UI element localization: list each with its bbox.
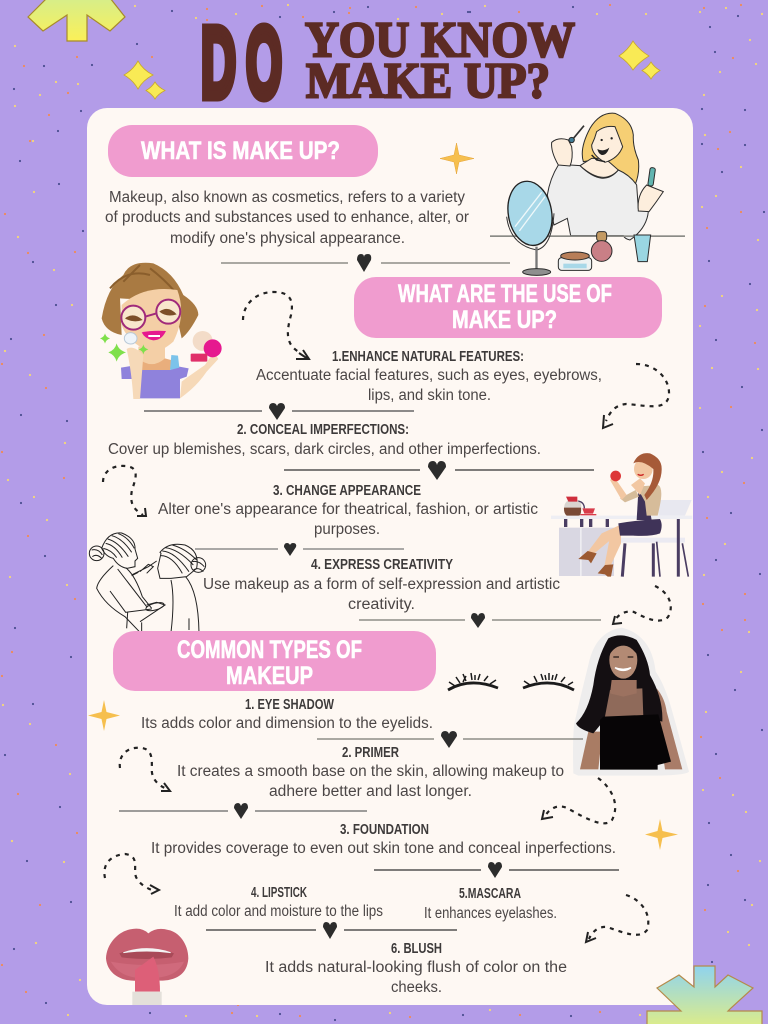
text block: mascara: 5.MASCARA (459, 886, 521, 902)
text block: conceal imperfections: Cover up blemishes, scars, dark circles, and other imperfections. (108, 441, 541, 458)
arrow: dashed left 2 (120, 748, 170, 791)
icon: gold star 1 (440, 143, 474, 174)
heading: what is make up (108, 125, 378, 177)
text block: change appearance: Alter one's appearance for theatrical, fashion, or artistic (158, 501, 538, 518)
divider (206, 922, 457, 939)
text block: conceal imperfections: 2. CONCEAL IMPERFECTIONS: (237, 422, 409, 438)
text block: mascara: It enhances eyelashes. (424, 905, 557, 922)
divider (195, 543, 404, 556)
heading: what are the use of make up (354, 277, 662, 338)
photo: woman in black top (573, 628, 689, 776)
divider (317, 731, 583, 748)
arrow: dashed to enhance (243, 292, 309, 359)
illustration: blonde woman with mirror (490, 113, 685, 275)
icon: yellow arrow star top left (28, 0, 125, 41)
text block: primer: It creates a smooth base on the skin, allowing makeup to (177, 763, 564, 780)
text block: primer (177, 745, 564, 800)
text block: blush: 6. BLUSH (391, 941, 442, 957)
icon: gradient star bottom right (647, 966, 762, 1024)
title: you know make up (305, 11, 575, 108)
text: O (246, 7, 282, 119)
text block: primer: adhere better and last longer. (269, 783, 472, 800)
panel: main card (87, 108, 693, 1005)
divider (144, 403, 414, 420)
icon: sparkles right (619, 41, 660, 79)
icon: gold star 3 (645, 819, 678, 850)
text block: primer: 2. PRIMER (342, 745, 399, 761)
text block: enhance natural features: 1.ENHANCE NATURAL FEATURES: (332, 349, 524, 365)
text block: change appearance: purposes. (314, 521, 380, 538)
text block: change appearance (158, 483, 538, 538)
icon: gold star 2 (88, 700, 120, 731)
text block: eye shadow: Its adds color and dimension to the eyelids. (141, 715, 433, 732)
text block: definition: modify one's physical appearance. (170, 230, 405, 247)
text block: enhance natural features: Accentuate facial features, such as eyes, eyebrows, (256, 367, 602, 384)
arrow: dashed left 3 (104, 854, 159, 894)
illustration: woman with glasses (100, 263, 222, 399)
heading: what are the use of make up: WHAT ARE THE USE OF (398, 280, 612, 308)
text block: express creativity: 4. EXPRESS CREATIVITY (311, 557, 453, 573)
text block: definition: of products and substances used to enhance, alter, or (105, 209, 469, 226)
text block: lipstick (174, 885, 383, 920)
text block: foundation: It provides coverage to even out skin tone and conceal inperfections. (151, 840, 616, 857)
text block: definition (105, 189, 469, 247)
divider (374, 862, 619, 878)
text block: foundation (151, 822, 616, 857)
text block: express creativity: creativity. (348, 596, 415, 613)
arrow: dashed left 1 (103, 466, 146, 516)
heading: what is make up: WHAT IS MAKE UP? (141, 137, 340, 165)
illustration: line art makeup artist (89, 533, 206, 632)
divider (221, 254, 510, 272)
text block: foundation: 3. FOUNDATION (340, 822, 429, 838)
illustration: seated woman at table (551, 453, 692, 577)
arrow: dashed right 2 (613, 586, 671, 624)
arrow: dashed right 1 (603, 364, 669, 428)
heading: common types of makeup: MAKEUP (226, 662, 313, 690)
divider (284, 461, 594, 480)
text block: express creativity: Use makeup as a form of self-expression and artistic (203, 576, 560, 593)
text block: lipstick: It add color and moisture to the lips (174, 903, 383, 920)
text block: blush (265, 941, 567, 996)
text block: lipstick: 4. LIPSTICK (251, 885, 307, 901)
text block: blush: It adds natural-looking flush of color on the (265, 959, 567, 976)
title: DO: D (201, 7, 236, 119)
title: you know make up: MAKE UP? (306, 52, 550, 108)
heading: what are the use of make up: MAKE UP? (452, 306, 557, 334)
text block: enhance natural features: lips, and skin tone. (368, 387, 491, 404)
text block: blush: cheeks. (391, 979, 442, 996)
text block: express creativity (203, 557, 560, 613)
text block: eye shadow (141, 697, 433, 732)
illustration: lips and lipstick (106, 929, 188, 1005)
icon: eyelashes (448, 673, 574, 690)
text block: eye shadow: 1. EYE SHADOW (245, 697, 334, 713)
heading: common types of makeup (113, 631, 436, 691)
text block: definition: Makeup, also known as cosmetics, refers to a variety (109, 189, 465, 206)
icon: sparkles left (124, 61, 165, 99)
text block: mascara (424, 886, 557, 922)
divider (359, 613, 601, 628)
arrow: dashed right 3 (542, 778, 615, 823)
text block: conceal imperfections (108, 422, 541, 458)
text block: change appearance: 3. CHANGE APPEARANCE (273, 483, 421, 499)
text block: enhance natural features (256, 349, 602, 404)
divider (119, 803, 367, 819)
title: you know make up: YOU KNOW (305, 11, 575, 67)
arrow: dashed right 4 (586, 895, 648, 942)
heading: common types of makeup: COMMON TYPES OF (177, 636, 362, 664)
